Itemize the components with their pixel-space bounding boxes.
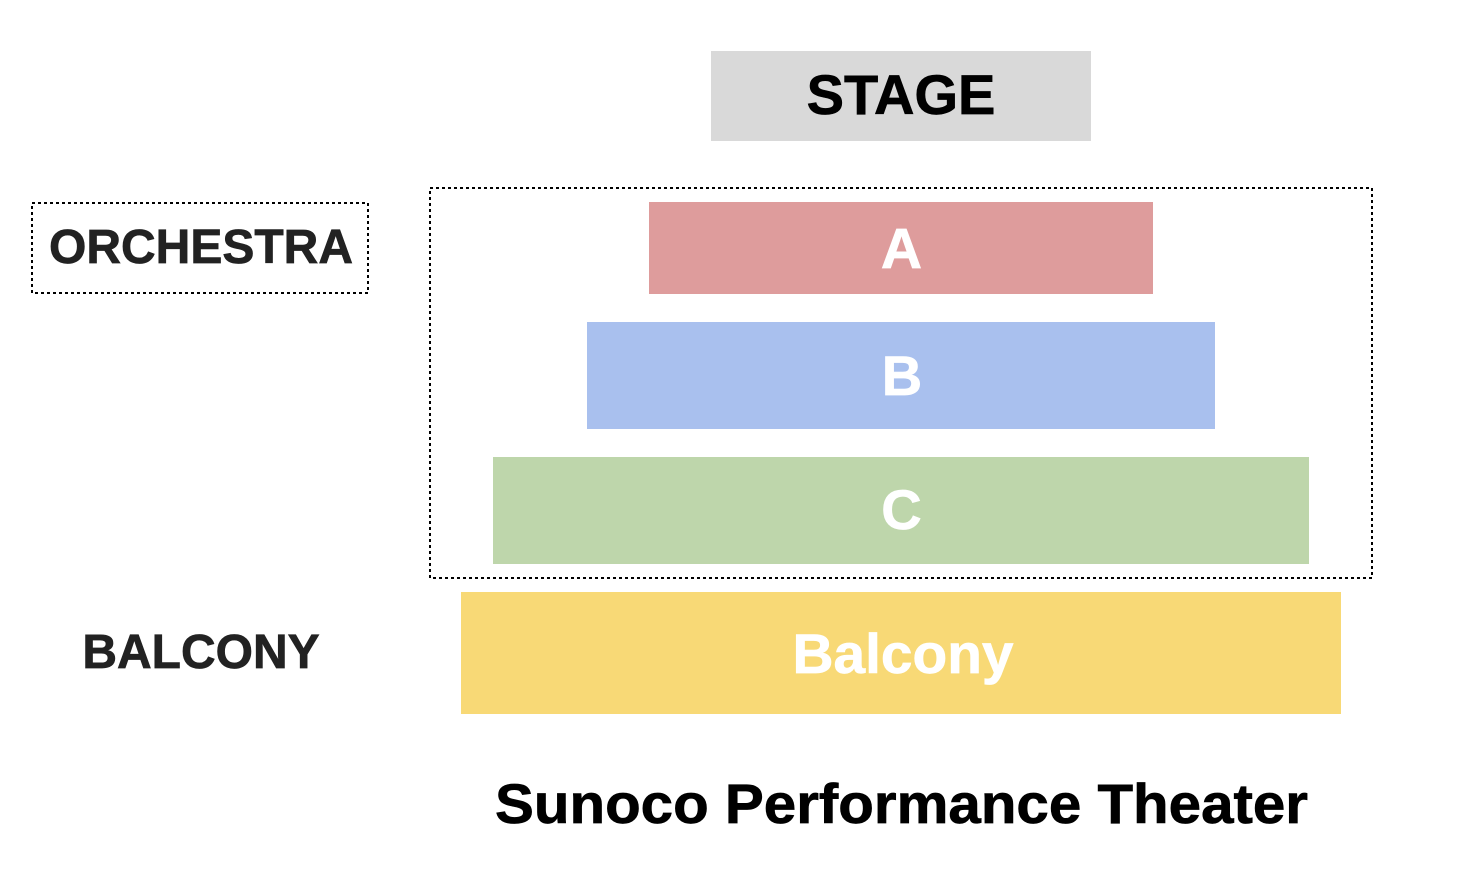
stage: STAGE xyxy=(807,63,995,126)
title: Sunoco Performance Theater xyxy=(495,772,1308,835)
section B: B xyxy=(882,344,922,407)
orchestra label box xyxy=(32,203,368,293)
orchestra seating outline xyxy=(430,188,1372,578)
section A xyxy=(649,202,1153,294)
stage xyxy=(711,51,1091,141)
balcony section xyxy=(461,592,1341,714)
orchestra label box: ORCHESTRA xyxy=(49,221,353,274)
section A: A xyxy=(881,217,922,281)
balcony label: BALCONY xyxy=(82,626,320,679)
section B xyxy=(587,322,1215,429)
section C xyxy=(493,457,1309,564)
balcony section: Balcony xyxy=(792,622,1014,685)
section C: C xyxy=(881,478,922,541)
